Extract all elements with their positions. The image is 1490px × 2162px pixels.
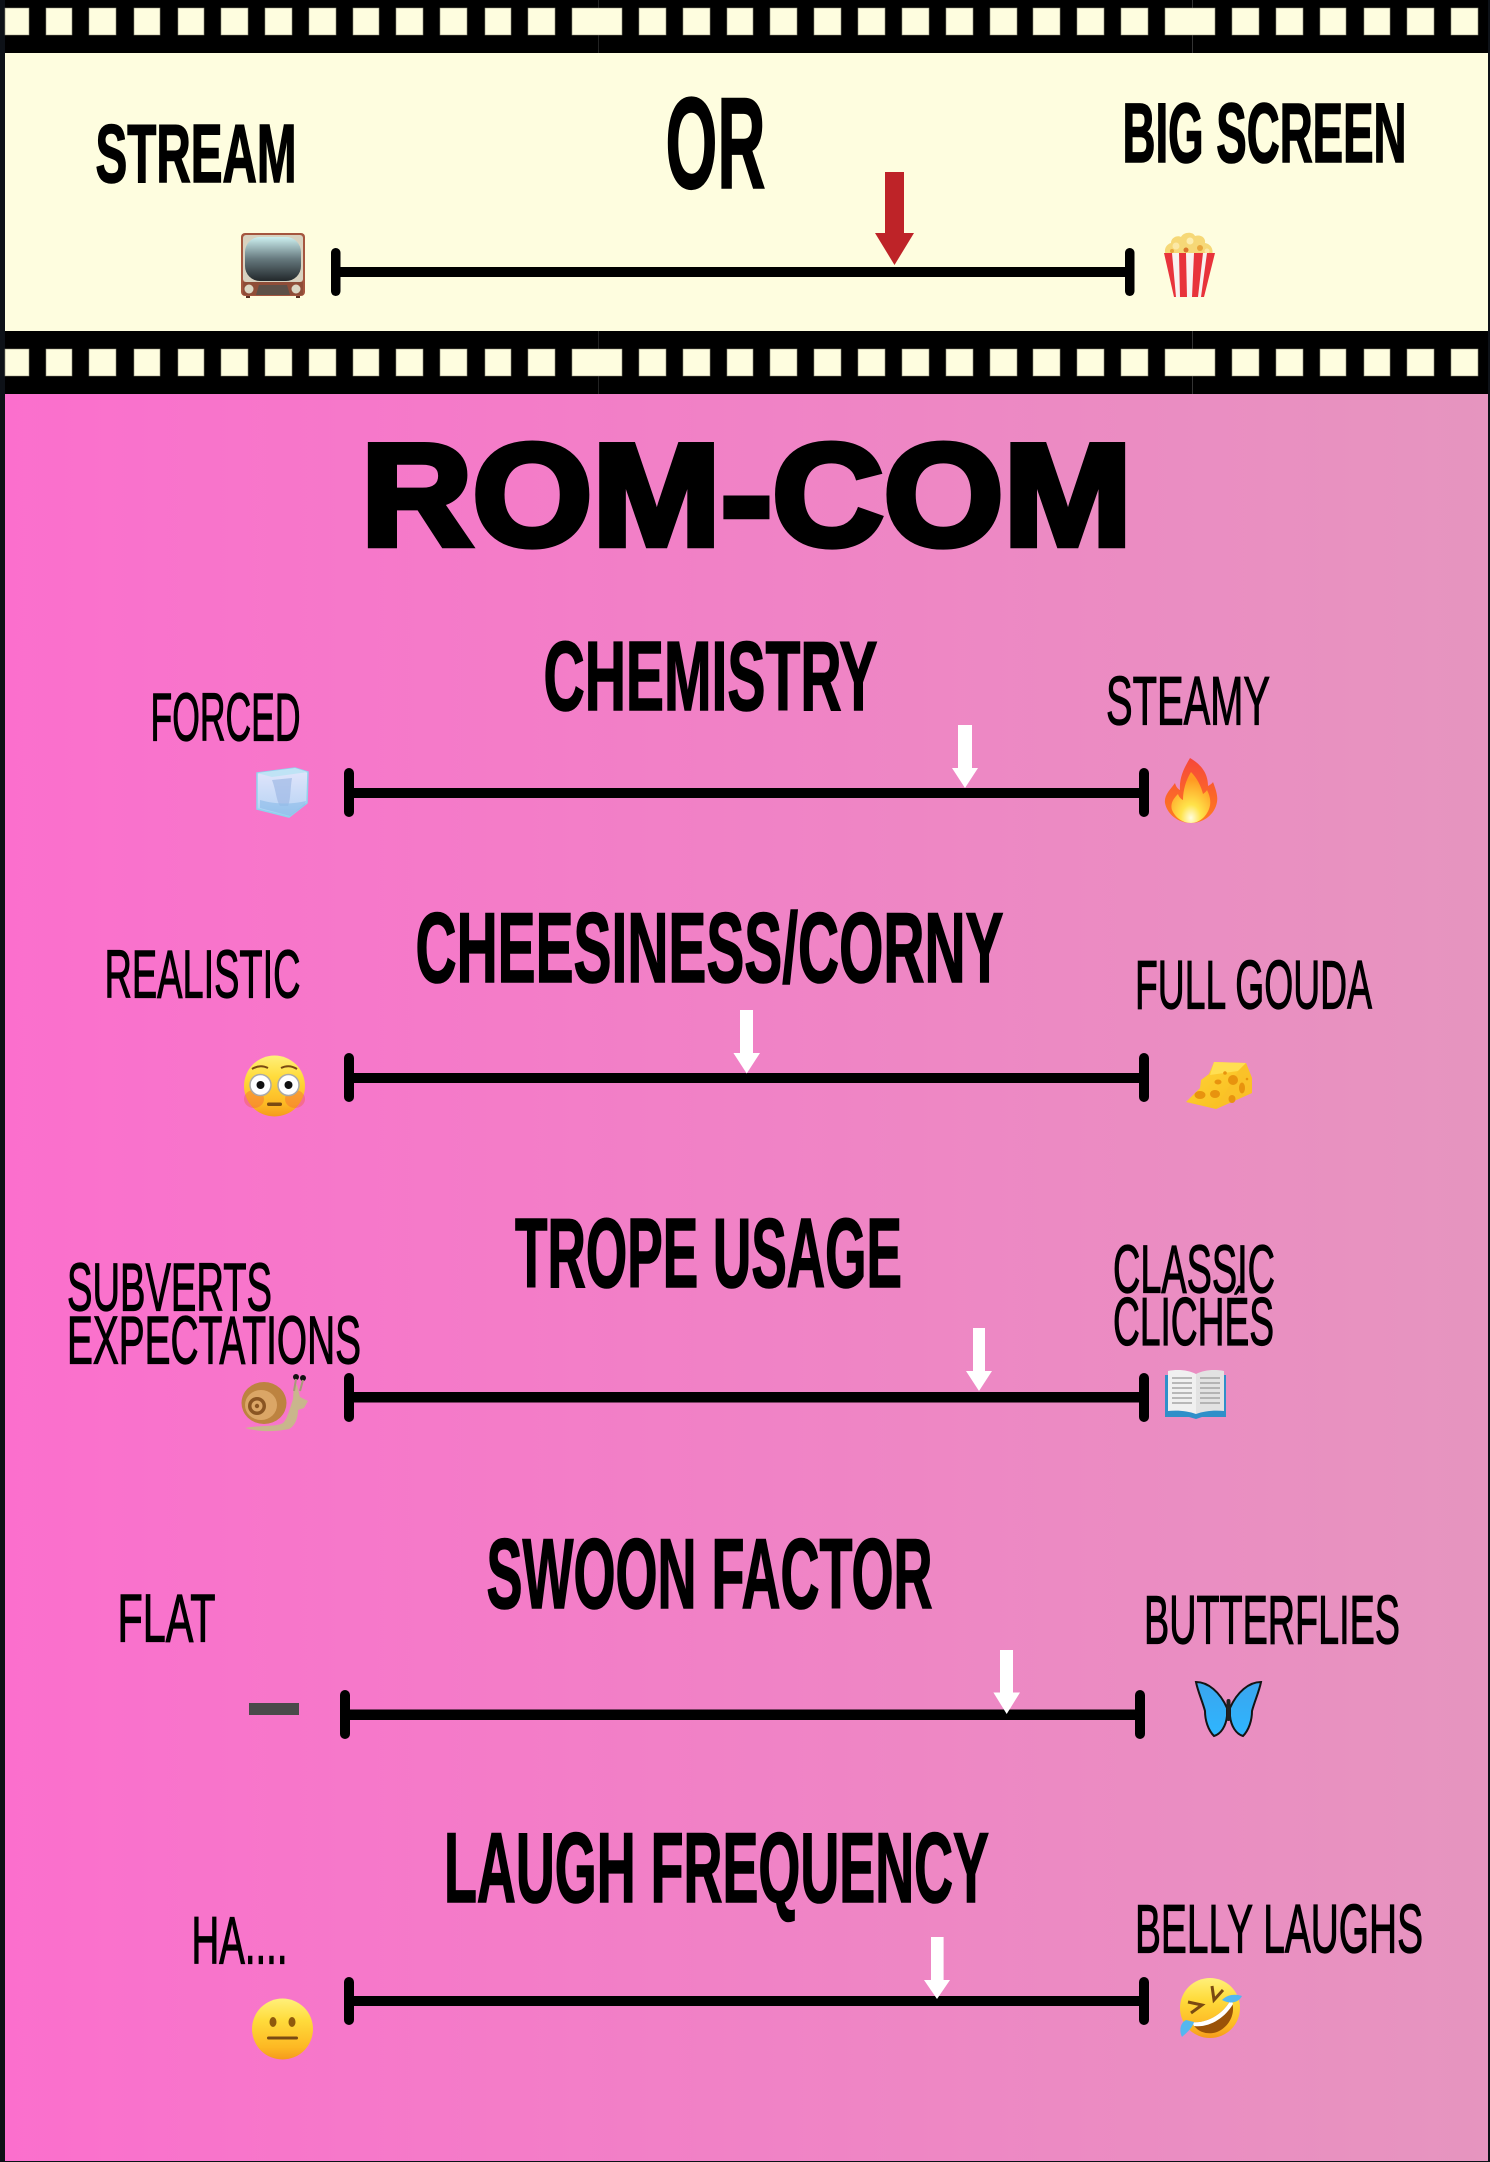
icon: neutral face: [252, 1998, 313, 2060]
label: steamy: STEAMY: [1106, 662, 1270, 740]
label: classic cliches: CLICHÉS: [1113, 1284, 1274, 1360]
icon: dash: [249, 1703, 299, 1715]
label: ha: HA....: [192, 1904, 288, 1978]
icon: ice cube: [257, 768, 308, 817]
icon: open book: [1165, 1370, 1226, 1419]
icon: fire: [1165, 758, 1217, 823]
icon: cheese: [1186, 1062, 1252, 1109]
arrow: white marker: [733, 1010, 760, 1074]
icon: popcorn: [1164, 233, 1215, 297]
label: forced: FORCED: [150, 680, 300, 756]
rating: chemistry: [150, 621, 1270, 823]
arrow: white marker: [924, 1937, 950, 1999]
arrow: red marker: [875, 172, 914, 265]
heading: cheesiness/corny: CHEESINESS/CORNY: [416, 892, 1004, 1003]
label: subverts expectations: EXPECTATIONS: [67, 1302, 361, 1378]
scale: flat to butterflies: [340, 1690, 1145, 1739]
arrow: white marker: [993, 1650, 1020, 1714]
label: classic cliches: CLASSIC: [1113, 1232, 1275, 1308]
heading: laugh frequency: LAUGH FREQUENCY: [444, 1812, 989, 1923]
icon: rolling on the floor laughing: [1180, 1978, 1242, 2038]
icon: flushed face: [244, 1056, 305, 1116]
arrow: white marker: [966, 1328, 992, 1391]
heading: trope usage: TROPE USAGE: [515, 1198, 902, 1308]
label: subverts expectations: [67, 1250, 361, 1378]
rating: swoon factor: [118, 1518, 1400, 1739]
icon: snail: [242, 1374, 308, 1431]
label: classic cliches: [1113, 1232, 1275, 1360]
heading: swoon factor: SWOON FACTOR: [486, 1518, 932, 1629]
scale: ha to belly laughs: [344, 1977, 1149, 2025]
scale: subverts to cliches: [344, 1373, 1149, 1422]
icon: television: [241, 233, 305, 298]
rating: trope usage: [67, 1198, 1275, 1431]
icon: butterfly: [1196, 1682, 1261, 1736]
heading: OR: OR: [666, 70, 766, 216]
panel: stream or big screen film strip: [5, 0, 1488, 394]
scale: stream to big screen: [331, 248, 1134, 296]
scale: realistic to full gouda: [344, 1053, 1149, 1102]
label: subverts expectations: SUBVERTS: [67, 1250, 272, 1326]
arrow: white marker: [952, 725, 978, 788]
rating: cheesiness: [104, 892, 1372, 1116]
heading: chemistry: CHEMISTRY: [544, 621, 878, 731]
label: stream: STREAM: [96, 107, 296, 200]
label: realistic: REALISTIC: [104, 936, 300, 1012]
rating: laugh frequency: [192, 1812, 1423, 2060]
label: flat: FLAT: [118, 1580, 216, 1656]
title: ROM-COM: [361, 414, 1132, 576]
scale: forced to steamy: [344, 768, 1149, 817]
